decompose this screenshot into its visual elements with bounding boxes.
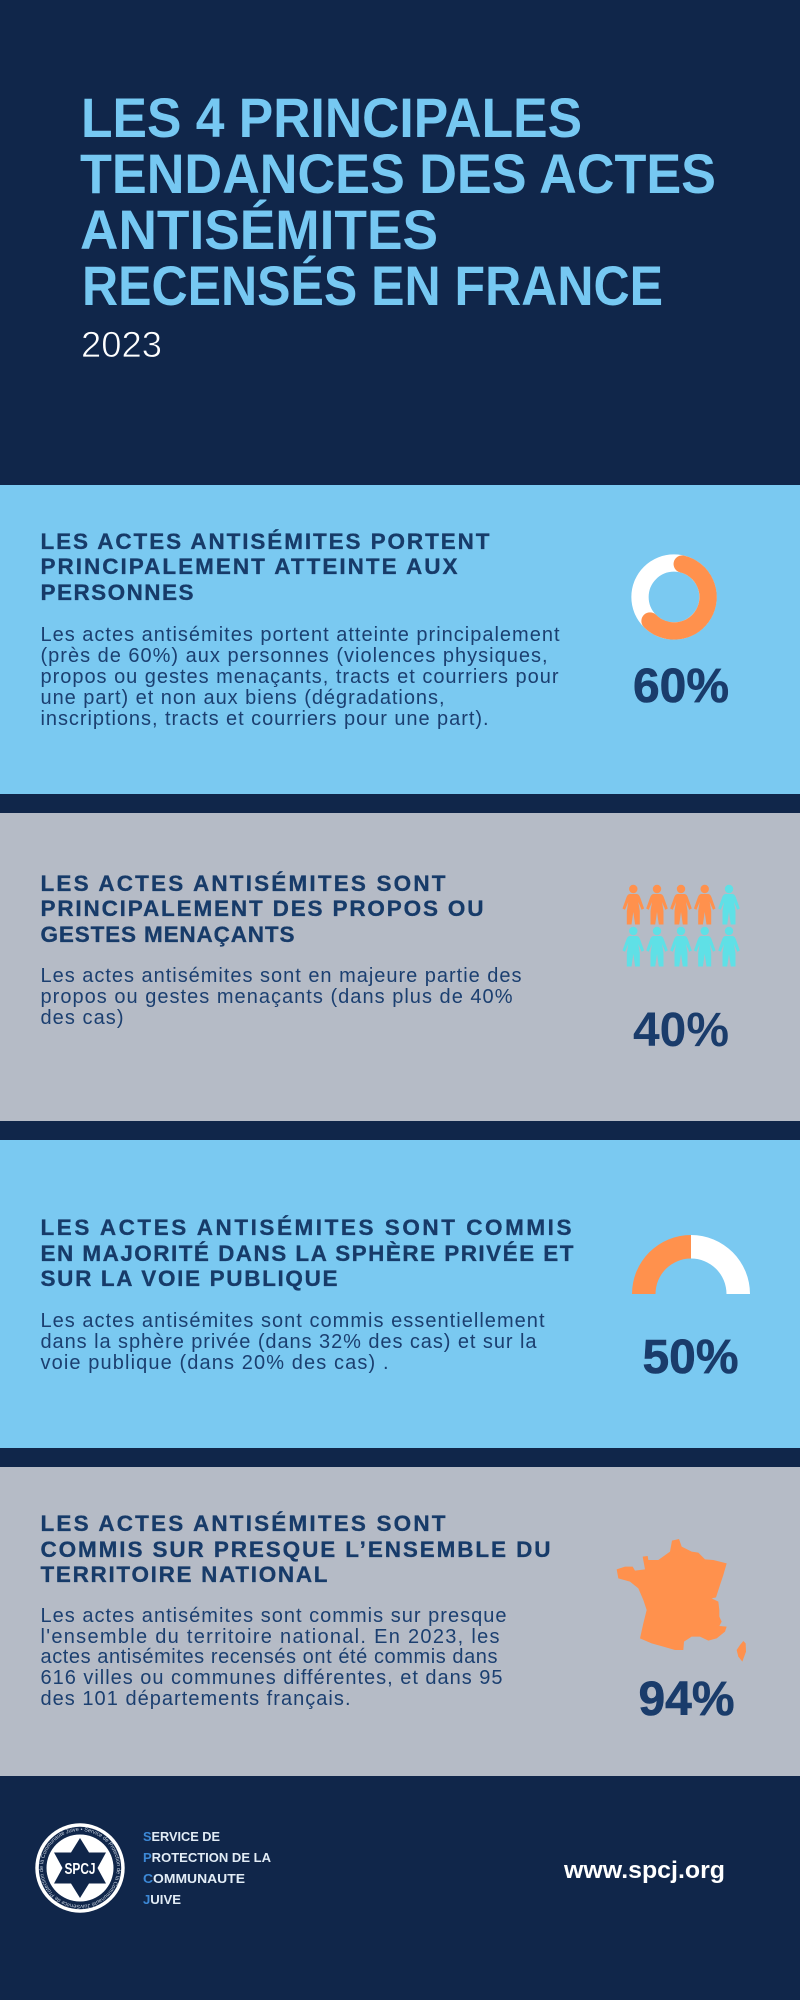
organisation name: SERVICE DE: [143, 1829, 220, 1844]
heading: PRINCIPALEMENT ATTEINTE AUX: [40, 554, 458, 579]
text block: Les actes antisémites sont commis sur presque: [40, 1605, 506, 1627]
heading: [40, 1215, 574, 1291]
text block: (près de 60%) aux personnes (violences physiques,: [40, 645, 548, 667]
heading: LES ACTES ANTISÉMITES PORTENT: [40, 529, 490, 554]
title: TENDANCES DES ACTES: [80, 142, 716, 205]
heading: PRINCIPALEMENT DES PROPOS OU: [40, 896, 484, 921]
title: RECENSÉS EN FRANCE: [82, 254, 663, 317]
text block: [40, 1605, 506, 1710]
header: [80, 86, 716, 365]
text block: des 101 départements français.: [40, 1688, 350, 1710]
title: ANTISÉMITES: [80, 198, 438, 261]
text block: [40, 1310, 545, 1374]
heading: PERSONNES: [40, 580, 194, 605]
text block: actes antisémites recensés ont été commis dans: [40, 1646, 498, 1668]
organisation name: [143, 1829, 272, 1907]
organisation name: COMMUNAUTE: [143, 1871, 245, 1886]
heading: [40, 1511, 550, 1587]
organisation name: PROTECTION DE LA: [143, 1850, 272, 1865]
heading: [40, 871, 484, 947]
heading: GESTES MENAÇANTS: [40, 922, 294, 947]
logo: SPCJ seal: Service de Protection de la Communauté Juive • Service de Protection de la Communauté Juive: [39, 1828, 121, 1909]
text block: Les actes antisémites sont commis essentiellement: [40, 1310, 545, 1332]
pictogram: 4 of 10 people: [622, 885, 740, 966]
year: 2023: [81, 324, 162, 365]
value: 40%: 40%: [633, 1004, 729, 1057]
text block: propos ou gestes menaçants (dans plus de 40%: [40, 986, 513, 1008]
heading: LES ACTES ANTISÉMITES SONT: [40, 871, 446, 896]
text block: Les actes antisémites sont en majeure partie des: [40, 965, 522, 987]
logo: SPCJ seal: SPCJ: [64, 1861, 96, 1878]
text block: Les actes antisémites portent atteinte principalement: [40, 624, 560, 646]
text block: une part) et non aux biens (dégradations,: [40, 687, 444, 709]
value: 94%: 94%: [638, 1673, 734, 1726]
text block: des cas): [40, 1007, 124, 1029]
title: LES 4 PRINCIPALES: [81, 86, 582, 149]
organisation name: JUIVE: [143, 1892, 181, 1907]
title: [80, 86, 716, 317]
panel: sphère privée et voie publique: [0, 1140, 800, 1448]
text block: inscriptions, tracts et courriers pour une part).: [40, 708, 488, 730]
heading: COMMIS SUR PRESQUE L’ENSEMBLE DU: [40, 1537, 550, 1562]
icon: map of France: [617, 1539, 746, 1662]
text block: l'ensemble du territoire national. En 2023, les: [40, 1626, 500, 1648]
heading: TERRITOIRE NATIONAL: [40, 1562, 328, 1587]
text block: 616 villes ou communes différentes, et dans 95: [40, 1667, 503, 1689]
heading: SUR LA VOIE PUBLIQUE: [40, 1266, 338, 1291]
heading: EN MAJORITÉ DANS LA SPHÈRE PRIVÉE ET: [40, 1241, 574, 1266]
panel: atteinte aux personnes: [0, 485, 800, 794]
text block: dans la sphère privée (dans 32% des cas) et sur la: [40, 1331, 537, 1353]
value: 50%: 50%: [642, 1331, 738, 1384]
text block: voie publique (dans 20% des cas) .: [40, 1352, 388, 1374]
value: 60%: 60%: [633, 660, 729, 713]
heading: [40, 529, 490, 605]
text block: propos ou gestes menaçants, tracts et courriers pour: [40, 666, 559, 688]
website: www.spcj.org: [563, 1857, 725, 1884]
panel: ensemble du territoire: [0, 1467, 800, 1776]
text block: [40, 624, 560, 730]
logo: SPCJ seal: [35, 1823, 125, 1913]
heading: LES ACTES ANTISÉMITES SONT COMMIS: [40, 1215, 572, 1240]
donut chart: 60%: [640, 563, 708, 631]
panel: propos ou gestes menaçants: [0, 813, 800, 1121]
text block: [40, 965, 522, 1029]
heading: LES ACTES ANTISÉMITES SONT: [40, 1511, 446, 1536]
half donut chart: 50%: [632, 1235, 750, 1294]
